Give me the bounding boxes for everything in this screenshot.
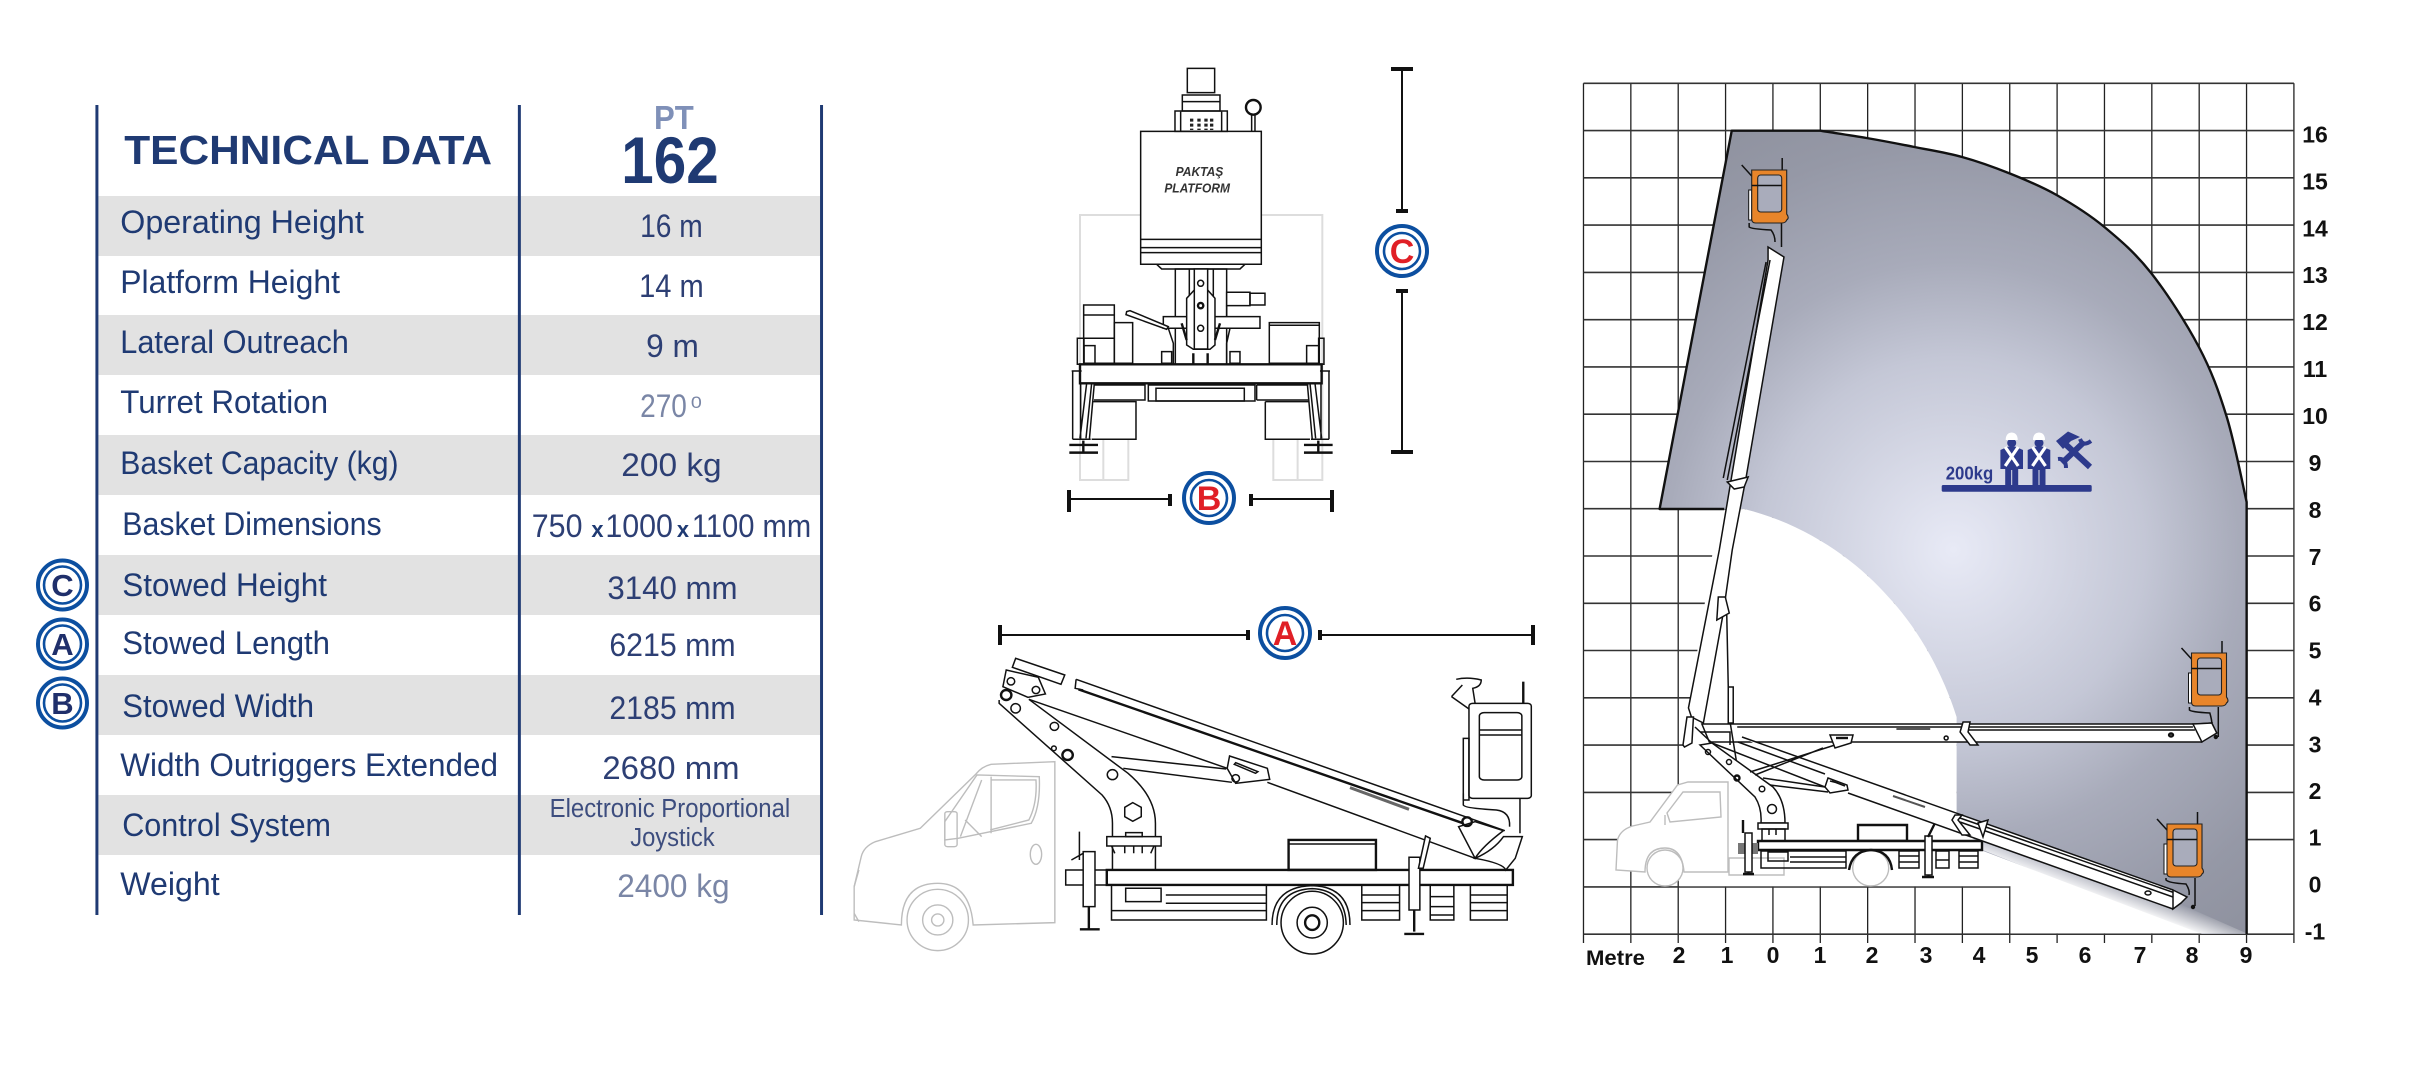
shaded reach envelope bbox=[1660, 131, 2247, 934]
heading: model 162: 162 bbox=[621, 123, 719, 197]
axis: outreach labels in metres: 4 bbox=[1973, 942, 1986, 968]
axis: height labels in metres: 9 bbox=[2309, 450, 2321, 476]
lowered boom position bbox=[1712, 737, 2195, 909]
row values: 1000 bbox=[605, 508, 673, 544]
drawing: rear view of truck platform bbox=[1069, 68, 1333, 480]
axis: height labels in metres: 13 bbox=[2302, 262, 2328, 288]
axis: height labels in metres: 2 bbox=[2309, 778, 2321, 804]
row values: 270 bbox=[640, 388, 687, 424]
badge: C stowed height: C bbox=[51, 568, 74, 603]
panel: technical data table bbox=[95, 99, 823, 915]
axis: outreach labels in metres: 3 bbox=[1920, 942, 1932, 968]
chart: working range diagram bbox=[1583, 83, 2328, 970]
link arms to collar bbox=[1695, 727, 1853, 775]
row labels: Stowed Height bbox=[122, 567, 327, 603]
axis: outreach labels in metres: 2 bbox=[1866, 942, 1878, 968]
axis: outreach labels in metres bbox=[1586, 942, 2252, 970]
capacity icon: 200kg with two workers and tools bbox=[1942, 432, 2092, 492]
row labels: Weight bbox=[120, 866, 220, 902]
axis: height labels in metres: 12 bbox=[2302, 309, 2328, 335]
row values: 6215 mm bbox=[609, 627, 736, 663]
dimension B: stowed width: B bbox=[1197, 480, 1221, 518]
row values: 14 m bbox=[639, 268, 704, 304]
axis: outreach labels in metres: 5 bbox=[2026, 942, 2039, 968]
axis: height labels in metres: 7 bbox=[2309, 544, 2321, 570]
axis: height labels in metres: 15 bbox=[2302, 168, 2328, 194]
axis: height labels in metres: 4 bbox=[2309, 684, 2322, 710]
axis: height labels in metres: 14 bbox=[2302, 215, 2328, 241]
row labels: Turret Rotation bbox=[120, 384, 328, 420]
badge: A stowed length bbox=[38, 620, 87, 668]
dimension B: stowed width bbox=[1069, 473, 1332, 523]
row values: 2400 kg bbox=[617, 868, 730, 904]
chart grid bbox=[1583, 83, 2294, 943]
dimension C: stowed height: C bbox=[1390, 233, 1414, 271]
dimension A: stowed length bbox=[1000, 608, 1533, 658]
row labels: Operating Height bbox=[120, 204, 364, 240]
horizontal boom position bbox=[1702, 707, 2218, 745]
row labels bbox=[120, 204, 498, 902]
axis: outreach labels in metres: 1 bbox=[1721, 942, 1734, 968]
turret post bbox=[1700, 743, 1828, 841]
basket: horizontal position bbox=[2182, 641, 2228, 706]
axis: height labels in metres: 11 bbox=[2303, 356, 2327, 382]
heading: technical data: TECHNICAL DATA bbox=[124, 127, 492, 173]
axis: height labels in metres: 3 bbox=[2309, 732, 2321, 758]
row values: Joystick bbox=[630, 824, 715, 852]
dimension A: stowed length: A bbox=[1273, 615, 1297, 653]
axis: outreach labels in metres: 1 bbox=[1814, 942, 1827, 968]
badge: C stowed height bbox=[38, 560, 87, 610]
basket with bracket bbox=[1451, 678, 1531, 870]
row labels: Platform Height bbox=[120, 264, 340, 300]
axis: outreach labels in metres: 8 bbox=[2186, 942, 2199, 968]
boom arm bbox=[999, 658, 1505, 870]
row values: 1100 mm bbox=[692, 508, 811, 544]
row labels: Lateral Outreach bbox=[120, 324, 349, 360]
row values: Electronic Proportional bbox=[550, 795, 790, 823]
axis: outreach labels in metres: 7 bbox=[2134, 942, 2146, 968]
table column rules bbox=[95, 105, 823, 915]
truck cab outline bbox=[854, 762, 1055, 951]
row values: 0 bbox=[691, 393, 702, 412]
turret and chassis bbox=[1066, 833, 1513, 925]
drawing: side view of truck with stowed boom bbox=[854, 658, 1531, 954]
dimension C: stowed height bbox=[1377, 69, 1427, 452]
row values: 2185 mm bbox=[609, 690, 736, 726]
axis: height labels in metres: 10 bbox=[2302, 403, 2328, 429]
truck cab at ground bbox=[1616, 782, 1784, 886]
row values: 2680 mm bbox=[602, 750, 740, 786]
envelope outline bbox=[1660, 131, 2247, 934]
axis: outreach labels in metres: 2 bbox=[1673, 942, 1685, 968]
row labels: Stowed Width bbox=[122, 688, 314, 724]
envelope lower fade bbox=[1955, 805, 2247, 934]
row values: 200 kg bbox=[621, 447, 722, 483]
rear wheel bbox=[1281, 891, 1343, 954]
axis: height labels in metres: 0 bbox=[2309, 872, 2321, 898]
row values bbox=[532, 208, 811, 904]
rear outrigger bbox=[1404, 836, 1430, 934]
axis: outreach labels in metres: 9 bbox=[2240, 942, 2252, 968]
truck chassis at ground bbox=[1738, 820, 1982, 886]
row labels: Stowed Length bbox=[122, 625, 330, 661]
front outrigger bbox=[1071, 832, 1100, 929]
basket: lowered position bbox=[2157, 812, 2204, 877]
logo text: Paktaş Platform: PAKTAŞ bbox=[1176, 165, 1224, 179]
row labels: Width Outriggers Extended bbox=[120, 747, 498, 783]
row labels: Control System bbox=[122, 807, 331, 843]
logo text: Paktaş Platform: PLATFORM bbox=[1164, 182, 1230, 196]
axis: height labels in metres: 1 bbox=[2309, 824, 2322, 850]
axis: height labels in metres: -1 bbox=[2305, 918, 2325, 944]
badge: A stowed length: A bbox=[51, 627, 74, 662]
axis: outreach labels in metres: Metre bbox=[1586, 947, 1645, 970]
axis: outreach labels in metres: 6 bbox=[2079, 942, 2091, 968]
row values: 750 bbox=[532, 508, 582, 544]
white inner zone without grid bbox=[1680, 509, 2202, 933]
heading: model PT: PT bbox=[654, 99, 694, 136]
row values: 16 m bbox=[640, 208, 703, 244]
axis: height labels in metres: 8 bbox=[2309, 497, 2322, 523]
axis: height labels in metres: 16 bbox=[2302, 122, 2328, 148]
axis: height labels in metres bbox=[2302, 122, 2328, 944]
badge: B stowed width: B bbox=[51, 686, 74, 721]
axis: height labels in metres: 6 bbox=[2309, 590, 2321, 616]
badge: B stowed width bbox=[38, 678, 87, 728]
raised boom position bbox=[1683, 223, 1784, 760]
axis: outreach labels in metres: 0 bbox=[1767, 942, 1779, 968]
table row bands bbox=[98, 196, 821, 855]
row values: x bbox=[591, 517, 604, 542]
basket: raised position bbox=[1742, 158, 1788, 223]
row values: 3140 mm bbox=[607, 570, 738, 606]
row labels: Basket Capacity (kg) bbox=[120, 445, 399, 481]
row values: 9 m bbox=[646, 328, 699, 364]
capacity icon: 200kg with two workers and tools: 200kg bbox=[1946, 463, 1993, 483]
axis: height labels in metres: 5 bbox=[2309, 638, 2322, 664]
row values: x bbox=[677, 517, 690, 542]
row labels: Basket Dimensions bbox=[122, 506, 382, 542]
logo text: Paktaş Platform bbox=[1164, 165, 1230, 196]
